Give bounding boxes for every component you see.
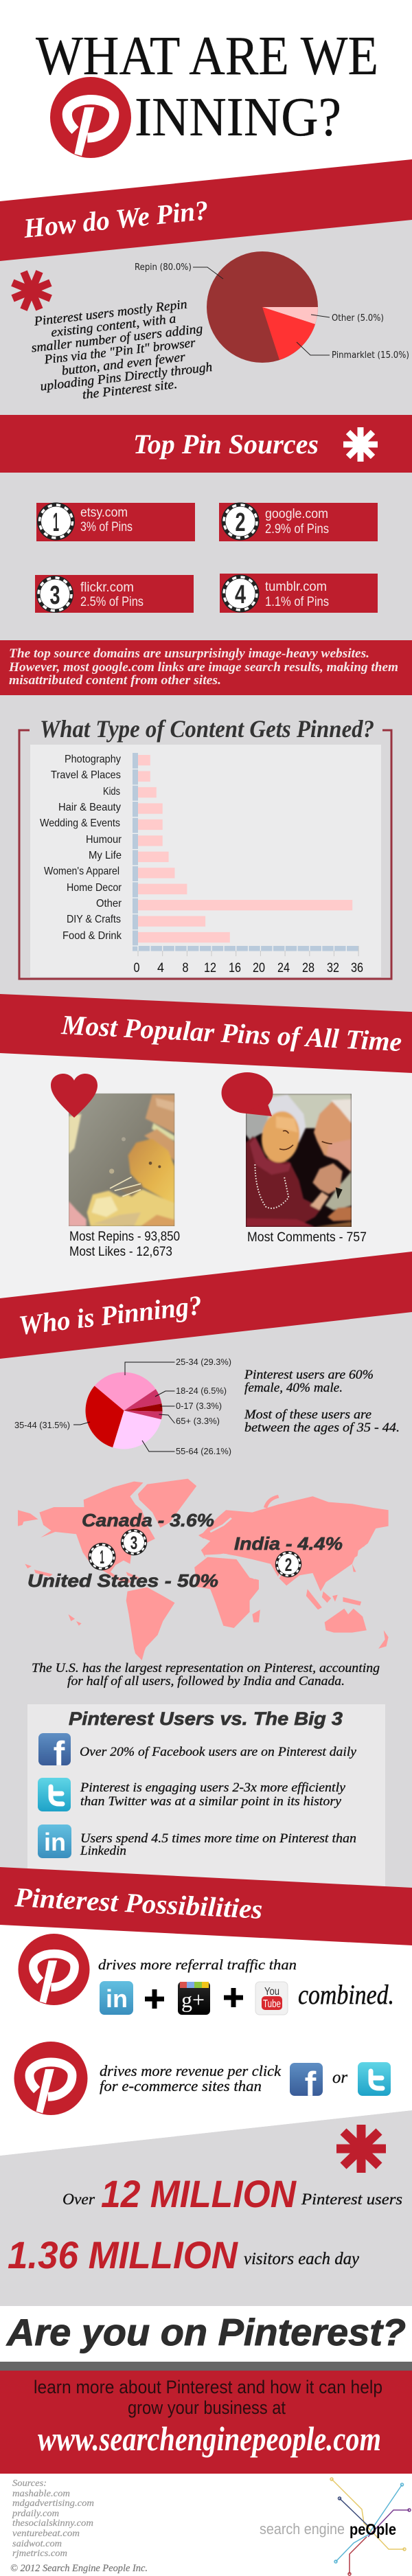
map badge 3: 3 [130,1533,137,1553]
icon: linkedin: in [106,1985,128,2013]
heading: top pin sources: Top Pin Sources [133,429,319,460]
band: pinterest possibilities [0,1867,412,1945]
band: most popular pins [0,994,412,1073]
title [36,26,378,148]
bar chart: content types: 36 [351,961,363,975]
source card 4: 1.1% of Pins [265,595,329,609]
icon: speech bubble [221,1072,273,1116]
icon: red asterisk [5,264,58,317]
bar chart: content types: Women's Apparel [44,866,119,877]
icon: pinterest logo large [19,1934,90,2005]
gray background: who is pinning [0,1278,412,1917]
text: linkedin stat: Users spend 4.5 times more time on Pinterest than [80,1831,356,1846]
bar chart: content types: Kids [103,786,120,798]
text: sources: prdaily.com [12,2509,59,2519]
bar chart: content types: 16 [229,961,241,975]
text: revenue per click [100,2062,282,2094]
source card 3: 2.5% of Pins [80,595,144,609]
text: how we pin description: Pins via the "Pin It" browser [43,336,196,368]
source card 1: 3% of Pins [80,520,133,534]
bar chart: content types: Hair & Beauty [58,802,121,813]
map badge 1 [88,1543,116,1570]
text: demographics: Most of these users are [244,1408,371,1422]
bar chart: content types: Home Decor [67,882,122,894]
map label: canada: Canada - 3.6% [82,1510,214,1530]
heading: are you on pinterest: Are you on Pinterest? [5,2311,406,2353]
icon: white asterisk [343,427,378,462]
gray strip [0,2362,412,2371]
source card 2: 2 [235,508,246,537]
text: demographics [244,1368,400,1435]
gray background: how we pin to content chart [0,192,412,1030]
source card 2: 2.9% of Pins [265,522,329,536]
icon: facebook: f [54,1735,65,1773]
icon: red asterisk stats [336,2125,386,2173]
stat: 12 million users: Pinterest users [301,2191,402,2208]
bar chart: content types: DIY & Crafts [67,914,121,925]
chart: pin method pie: Repin (80.0%) [135,262,192,273]
icon: linkedin: in [44,1828,66,1856]
icon: facebook [38,1733,71,1773]
bar chart: content types: Wedding & Events [40,817,120,829]
text: most repins and likes: Most Repins - 93,850 [69,1230,180,1244]
text: facebook stat: Over 20% of Facebook users are on Pinterest daily [80,1745,357,1759]
text: most repins and likes: Most Likes - 12,673 [69,1245,172,1259]
icon: google plus: g+ [181,1987,205,2012]
text: demographics: female, 40% male. [244,1381,343,1395]
icon: pinterest logo second [14,2042,88,2115]
title: WHAT ARE WE [36,26,378,87]
map label: india: India - 4.4% [234,1533,343,1554]
text: sources: Sources: [12,2478,47,2489]
source card 1: 1 [53,508,59,537]
callout: source domains note: misattributed content from other sites. [9,673,221,688]
text: how we pin description: uploading Pins Directly through [39,360,213,394]
bar chart: content types: 12 [204,961,216,975]
icon: plus [145,1989,164,2009]
icon: facebook [290,2063,323,2103]
text: or: or [332,2068,347,2087]
bar chart: content types: 0 [133,961,140,975]
text: how we pin description [27,295,214,407]
bar chart: content types: 20 [253,961,265,975]
text: most comments: Most Comments - 757 [247,1230,367,1245]
bar chart: content types: Other [96,898,122,909]
text: us representation: for half of all users, followed by India and Canada. [67,1674,345,1688]
band: who is pinning [0,1252,412,1359]
chart: age pie: 35-44 (31.5%) [14,1420,70,1430]
panel: call to action [0,2371,412,2474]
logo: search engine people: peOple [350,2520,396,2538]
text: combined: combined. [298,1979,394,2010]
map badge 3 [121,1529,147,1555]
bar chart: content types: 4 [157,961,164,975]
heading: how do we pin: How do We Pin? [21,194,210,244]
chart: world map [18,1479,389,1660]
bar chart: content types: 24 [277,961,290,975]
source card 3: flickr.com [80,580,134,595]
bar chart: content types: Food & Drink [62,930,122,942]
callout: source domains note: However, most google.com links are image search results, making them [8,660,398,675]
chart: age pie: 18-24 (6.5%) [176,1386,227,1396]
chart frame and panel [19,730,391,979]
icon: linkedin [38,1824,71,1858]
stat: 12 million users: Over [62,2191,95,2208]
icon: pinterest logo [50,77,131,158]
bar chart: content types: Travel & Places [51,769,121,781]
text: how we pin description: the Pinterest site. [82,377,178,403]
logo: search engine people [260,2478,411,2575]
heading: who is pinning: Who is Pinning? [17,1289,203,1341]
white section behind possibilities [0,1896,412,2156]
heading: most popular pins: Most Popular Pins of All Time [60,1009,402,1057]
text: sources: venturebeat.com [12,2529,80,2539]
map label: united states: United States - 50% [27,1570,218,1591]
text: linkedin stat: Linkedin [80,1844,126,1858]
source card 4 [220,574,378,613]
icon: youtube: You [264,1986,279,1998]
icon: plus [224,1988,243,2007]
icon: twitter [358,2062,391,2096]
bar chart: content types: 8 [183,961,188,975]
source card 1 [36,503,195,541]
text: sources: thesocialskinny.com [12,2518,93,2529]
source card 1: etsy.com [80,506,128,520]
icon: linkedin [100,1981,133,2015]
band: how do we pin [0,159,412,261]
callout: source domains note [0,640,412,695]
bar chart: content types: Photography [65,754,121,765]
icon: youtube: Tube [263,1998,281,2010]
bar chart: content types: Humour [86,834,122,846]
callout: source domains note: The top source domains are unsurprisingly image-heavy websites. [9,646,369,661]
photo: elderly couple [246,1094,352,1227]
icon: twitter [38,1778,71,1811]
panel heading: Pinterest Users vs. The Big 3 [69,1708,343,1729]
stat: 1.36 million visitors [8,2233,360,2276]
text: twitter stat [80,1781,346,1809]
bar chart: content types: 28 [302,961,314,975]
heading: what type of content: What Type of Content Gets Pinned? [40,715,374,743]
panel: pinterest users vs big 3 [27,1704,385,1890]
chart: pin method pie [135,251,409,363]
source card 3 [35,575,194,613]
text: twitter stat: than Twitter was at a similar point in its history [80,1794,342,1809]
icon: heart [51,1074,98,1118]
source card 4: 4 [235,580,246,609]
text: sources [12,2478,94,2559]
text: us representation: The U.S. has the largest representation on Pinterest, accounting [32,1661,380,1675]
text: how we pin description: button, and even fewer [61,350,186,379]
text: copyright: © 2012 Search Engine People Inc. [10,2563,148,2574]
text: how we pin description: existing content, with a [50,312,176,340]
band: top pin sources [0,415,412,473]
text: demographics: Pinterest users are 60% [244,1368,374,1382]
text: us representation [32,1661,380,1688]
source card 2: google.com [265,507,328,521]
title: INNING? [135,87,341,148]
text: sources: rjmetrics.com [12,2549,67,2559]
icon: youtube [255,1982,288,2015]
text: most repins and likes [69,1230,180,1259]
stat: 1.36 million visitors: visitors each day [244,2250,360,2268]
source card 2 [219,503,378,541]
map badge 1: 1 [100,1546,104,1568]
chart: age pie: 25-34 (29.3%) [176,1357,231,1367]
bar chart: content types: My Life [89,850,122,861]
chart: pin method pie: Other (5.0%) [332,313,384,324]
text: how we pin description: Pinterest users mostly Repin [33,297,188,329]
panel: call to action: grow your business at [128,2397,286,2418]
text: sources: saidwot.com [12,2539,62,2549]
text: twitter stat: Pinterest is engaging users 2-3x more efficiently [80,1781,346,1795]
text: sources: mdgadvertising.com [12,2498,94,2509]
chart: age pie: 55-64 (26.1%) [176,1446,231,1456]
bar chart: content types: 32 [327,961,339,975]
light background: popular pins [0,1024,412,1326]
source card 3: 3 [49,581,60,610]
text: referral traffic: drives more referral traffic than [98,1956,297,1973]
source card 4: tumblr.com [265,580,327,594]
photo: cheesy bread [69,1094,174,1226]
chart: age pie [14,1357,231,1456]
text: sources: mashable.com [12,2489,70,2499]
icon: facebook: f [305,2065,317,2103]
text: linkedin stat [80,1831,356,1858]
icon: google plus [178,1982,210,2015]
gray background: statistics [0,2110,412,2306]
text: demographics: between the ages of 35 - 44. [244,1421,400,1435]
stat: 12 million users: 12 MILLION [101,2172,297,2215]
map badge 2: 2 [285,1555,292,1575]
text: how we pin description: smaller number of users adding [31,321,203,356]
text: revenue per click: drives more revenue per click [100,2062,282,2079]
map badge 2 [275,1551,301,1577]
chart: age pie: 65+ (3.3%) [176,1416,220,1426]
heading: pinterest possibilities: Pinterest Possibilities [14,1882,263,1925]
logo: search engine people: search engine [260,2520,345,2538]
panel: call to action: learn more about Pinterest and how it can help [34,2377,382,2397]
stat: 1.36 million visitors: 1.36 MILLION [8,2233,238,2276]
text: revenue per click: for e-commerce sites than [100,2077,262,2094]
bar chart: content types [40,753,363,975]
chart: age pie: 0-17 (3.3%) [176,1401,222,1411]
stat: 12 million users [62,2172,402,2215]
